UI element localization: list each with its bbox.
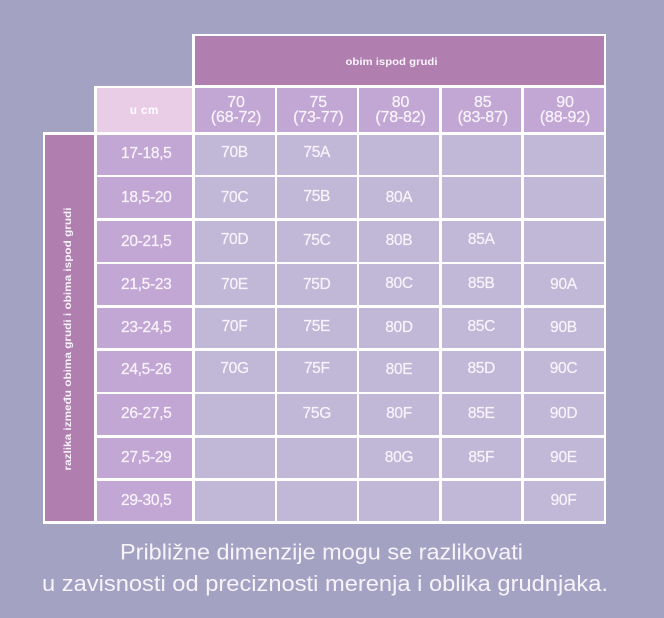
size 70E <box>194 264 274 305</box>
size 75G <box>277 394 356 435</box>
size 80E <box>359 350 439 392</box>
range label <box>96 308 192 348</box>
size 80G: 80G <box>385 449 413 466</box>
range label: 24,5-26 <box>121 361 171 378</box>
range label: 17-18,5 <box>121 144 171 162</box>
size 70D <box>194 220 274 262</box>
size 85B: 85B <box>468 274 495 292</box>
size 75G: 75G <box>303 404 331 422</box>
footnote text: Približne dimenzije mogu se razlikovati <box>120 539 523 564</box>
side heading: razlika između obima grudi i obima ispod grudi: razlika između obima grudi i obima ispod grudi <box>62 207 74 470</box>
range label <box>96 350 192 392</box>
size 75D: 75D <box>303 276 331 292</box>
size 85F: 85F <box>468 449 494 466</box>
header cell: 70: 70 <box>227 94 245 110</box>
size 75E <box>277 308 356 348</box>
header cell: 85: (83-87) <box>458 109 508 126</box>
size 80D: 80D <box>385 319 413 336</box>
header cell: 75: 75 <box>310 94 327 110</box>
range label <box>96 480 192 521</box>
header cell: 90: (88-92) <box>540 109 590 126</box>
size 90A: 90A <box>550 276 577 292</box>
row: 26-27,5 <box>94 392 606 438</box>
size 75C <box>277 220 356 262</box>
size 75F <box>277 350 356 392</box>
size 70F <box>194 308 274 348</box>
footnote text <box>42 539 608 596</box>
range label: 18,5-20 <box>121 188 171 206</box>
heading: obim ispod grudi <box>194 36 604 85</box>
range label <box>96 134 192 174</box>
size 70G <box>194 350 274 392</box>
size 70C: 70C <box>221 188 248 206</box>
size 85B <box>442 264 521 305</box>
size 80B: 80B <box>386 232 412 249</box>
size 90D: 90D <box>550 404 577 422</box>
footnote text: u zavisnosti od preciznosti merenja i oblika grudnjaka. <box>42 571 608 596</box>
size 85D: 85D <box>467 360 495 377</box>
size 85F <box>442 438 521 478</box>
size 75A <box>277 134 356 174</box>
header cell: 85 <box>442 88 521 132</box>
size 90F: 90F <box>551 492 576 509</box>
size 75F: 75F <box>304 360 330 377</box>
header cell: 85: 85 <box>474 94 491 110</box>
size 90B: 90B <box>550 319 577 336</box>
range label: 20-21,5 <box>121 232 171 250</box>
header cell: 90 <box>524 88 604 132</box>
size 80A: 80A <box>386 188 412 206</box>
range label <box>96 394 192 435</box>
size 75A: 75A <box>303 144 330 160</box>
size 80C: 80C <box>385 274 413 292</box>
row: 27,5-29 <box>94 435 606 480</box>
header cell: 75: (73-77) <box>293 109 343 126</box>
header cell: 80 <box>359 88 439 132</box>
size 75D <box>277 264 356 305</box>
size 70B <box>194 134 274 174</box>
size 90C <box>524 350 604 392</box>
size 80G <box>359 438 439 478</box>
header cell: 80: 80 <box>392 94 409 110</box>
row: 17-18,5 <box>94 132 606 177</box>
heading: obim ispod grudi: obim ispod grudi <box>345 56 437 68</box>
row: 18,5-20 <box>94 174 606 220</box>
row: 24,5-26 <box>94 348 606 394</box>
range label <box>96 220 192 262</box>
size 90E: 90E <box>550 449 577 466</box>
range label <box>96 438 192 478</box>
header cell: 70: (68-72) <box>211 109 261 126</box>
row: 29-30,5 <box>94 478 606 524</box>
header cell: u cm <box>96 88 192 132</box>
size 70B: 70B <box>221 144 248 160</box>
size 90A <box>524 264 604 305</box>
row: 23-24,5 <box>94 305 606 350</box>
row: 20-21,5 <box>94 218 606 264</box>
size 85E: 85E <box>468 404 495 422</box>
size 85E <box>442 394 521 435</box>
size 80A <box>359 177 439 218</box>
size 90F <box>524 480 604 521</box>
size 85A <box>442 220 521 262</box>
range label: 21,5-23 <box>121 276 171 292</box>
range label: 26-27,5 <box>121 404 171 422</box>
size 80D <box>359 308 439 348</box>
size 85D <box>442 350 521 392</box>
range label: 27,5-29 <box>121 449 171 466</box>
header row: unit and underbust sizes <box>94 86 606 134</box>
range label <box>96 177 192 218</box>
header cell: 75 <box>277 88 356 132</box>
range label: 23-24,5 <box>121 319 171 336</box>
header cell: u cm: u cm <box>130 105 159 117</box>
size 80F <box>359 394 439 435</box>
size 70G: 70G <box>220 360 249 377</box>
size 85C: 85C <box>467 318 495 335</box>
range label: 29-30,5 <box>121 492 171 509</box>
size 90B <box>524 308 604 348</box>
size 70F: 70F <box>222 318 247 335</box>
size 80B <box>359 220 439 262</box>
size 90C: 90C <box>550 360 577 377</box>
header cell: 80: (78-82) <box>375 109 426 126</box>
size 80C <box>359 264 439 305</box>
size 80F: 80F <box>386 404 412 422</box>
table backing: white grid lines <box>192 34 606 88</box>
size 85C <box>442 308 521 348</box>
size 90D <box>524 394 604 435</box>
size 70E: 70E <box>221 276 248 292</box>
size 75E: 75E <box>303 318 330 335</box>
size 70D: 70D <box>221 231 248 248</box>
size 80E: 80E <box>386 361 412 378</box>
size 75B <box>277 177 356 218</box>
size 75B: 75B <box>303 188 330 204</box>
row: 21,5-23 <box>94 262 606 308</box>
size 70C <box>194 177 274 218</box>
size 90E <box>524 438 604 478</box>
size 85A: 85A <box>468 231 495 248</box>
side heading: razlika između obima grudi i obima ispod grudi <box>42 132 96 524</box>
size 75C: 75C <box>303 232 331 249</box>
range label <box>96 264 192 305</box>
header cell: 90: 90 <box>556 94 574 110</box>
header cell: 70 <box>194 88 274 132</box>
